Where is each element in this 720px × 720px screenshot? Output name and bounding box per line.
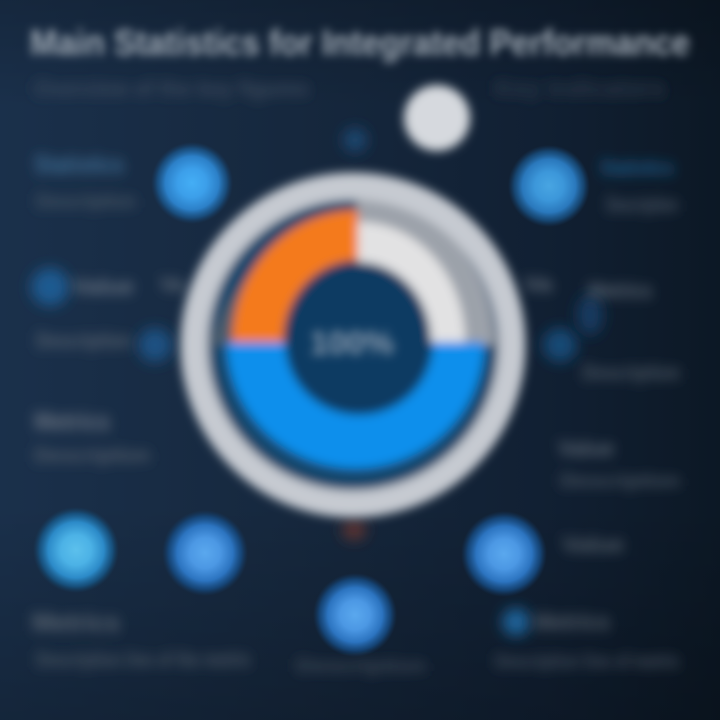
- label: middle left top: Value: [72, 274, 134, 299]
- label: upper right: [600, 155, 678, 217]
- icon: right inner marker: [543, 328, 577, 362]
- icon: bottom-left blue circle: [162, 510, 248, 596]
- ring interior: [206, 197, 502, 493]
- outer ring: [194, 186, 512, 504]
- label: bottom center: Description: [296, 656, 426, 676]
- label: bottom left: [32, 607, 251, 672]
- label: middle left bottom: Description: [34, 445, 150, 467]
- segment: orange: [232, 210, 358, 342]
- label: middle right bottom: Description: [560, 471, 680, 491]
- icon: right upper marker: [577, 295, 603, 335]
- icon: bottom-right blue circle: [461, 511, 547, 597]
- center hole: [281, 258, 437, 418]
- segment: light grey: [358, 222, 465, 342]
- label: middle right bottom: Value: [558, 436, 614, 461]
- upper interior: [210, 231, 498, 345]
- label: upper left: Description: [36, 191, 136, 213]
- label: middle right top: Description: [582, 360, 680, 385]
- label: upper left: [34, 149, 136, 213]
- label: middle left top: Description: [36, 328, 131, 353]
- label: near ring left: Va: [160, 274, 185, 296]
- icon: bottom-left cyan circle: [33, 507, 119, 593]
- label: bottom right: Value: [562, 532, 624, 557]
- label: middle right top: Metrics: [588, 278, 652, 303]
- label: bottom left: Metrics: [32, 607, 120, 637]
- donut chart: [194, 186, 512, 504]
- label: middle left top: [36, 274, 134, 353]
- icon: left small circle: [31, 268, 69, 306]
- label: bottom left: Description line of the metric: [36, 647, 251, 672]
- subtitle right: Key indicators: [495, 76, 665, 101]
- icon: upper-left blue circle: [151, 142, 233, 224]
- icon: top small marker: [343, 128, 367, 152]
- grey track: [357, 196, 494, 345]
- icon: upper-right blue circle: [508, 145, 590, 227]
- icon: bottom-center blue circle: [313, 573, 397, 657]
- label: middle right bottom: [558, 436, 680, 491]
- segment: blue: [227, 342, 484, 468]
- label: middle right top: [582, 278, 680, 385]
- label: bottom right: [495, 532, 680, 673]
- center label: 100%: [310, 325, 394, 361]
- label: middle left bottom: Metrics: [34, 406, 110, 436]
- label: upper right: Statistics: [600, 155, 674, 180]
- label: bottom right: Metrics: [534, 609, 610, 636]
- label: middle left bottom: [34, 406, 150, 467]
- label: upper left: Statistics: [34, 149, 124, 179]
- icon: ring bottom marker: [342, 520, 366, 540]
- icon: white circle: [404, 85, 470, 151]
- subtitle: Overview of the key figures: [34, 76, 309, 101]
- icon: bottom-right small marker: [502, 608, 530, 636]
- icon: left inner marker: [138, 328, 172, 362]
- label: near ring right: Va: [524, 274, 553, 296]
